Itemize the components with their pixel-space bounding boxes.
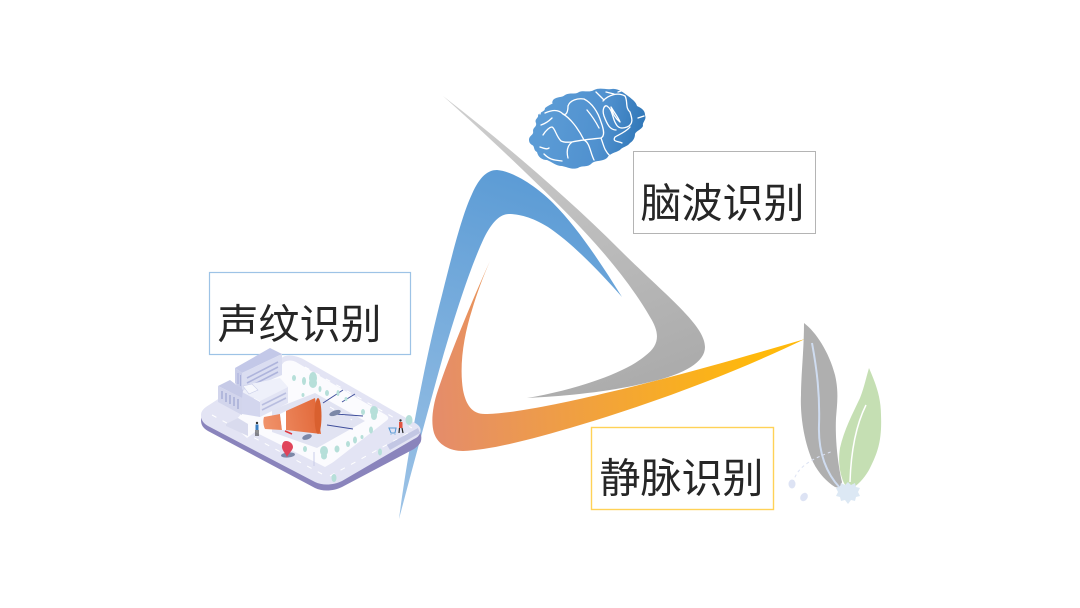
green leaf vein [850,405,866,482]
center plaza [272,393,365,448]
swoosh: blue [399,170,622,519]
label box: 声纹识别: 声纹识别 [218,302,382,348]
label box: 静脉识别 [592,428,774,510]
megaphone [263,398,322,434]
cars [281,409,341,458]
small seeds [788,480,796,488]
platform base [201,361,421,491]
label box: 静脉识别: 静脉识别 [600,456,764,502]
tall building [235,348,282,392]
road lines [323,390,363,429]
middle building [242,378,288,417]
person with cart [399,419,403,433]
small gatehouse [226,418,248,436]
label box: 脑波识别: 脑波识别 [640,180,804,226]
white lot [232,360,388,469]
platform top [201,356,421,485]
seed head [836,482,860,504]
swoosh: gray [443,96,705,398]
shopping cart [389,428,396,434]
illustration: megaphone city block [201,348,421,491]
map pin [282,441,293,457]
icon: leaves [788,323,881,504]
gray leaf vein [812,343,840,488]
swoosh: orange [432,261,805,451]
lamp post [313,452,315,466]
person [256,422,258,436]
dashed stem [793,451,833,483]
gray leaf [801,323,842,487]
left building [218,380,243,415]
label box: 声纹识别 [210,272,410,354]
label box: 脑波识别 [634,152,816,234]
green leaf [839,368,881,488]
lower right building [387,428,420,450]
road dashes [212,367,412,476]
icon: brain [529,89,645,169]
lower road strip [247,432,390,477]
trees [292,372,412,482]
